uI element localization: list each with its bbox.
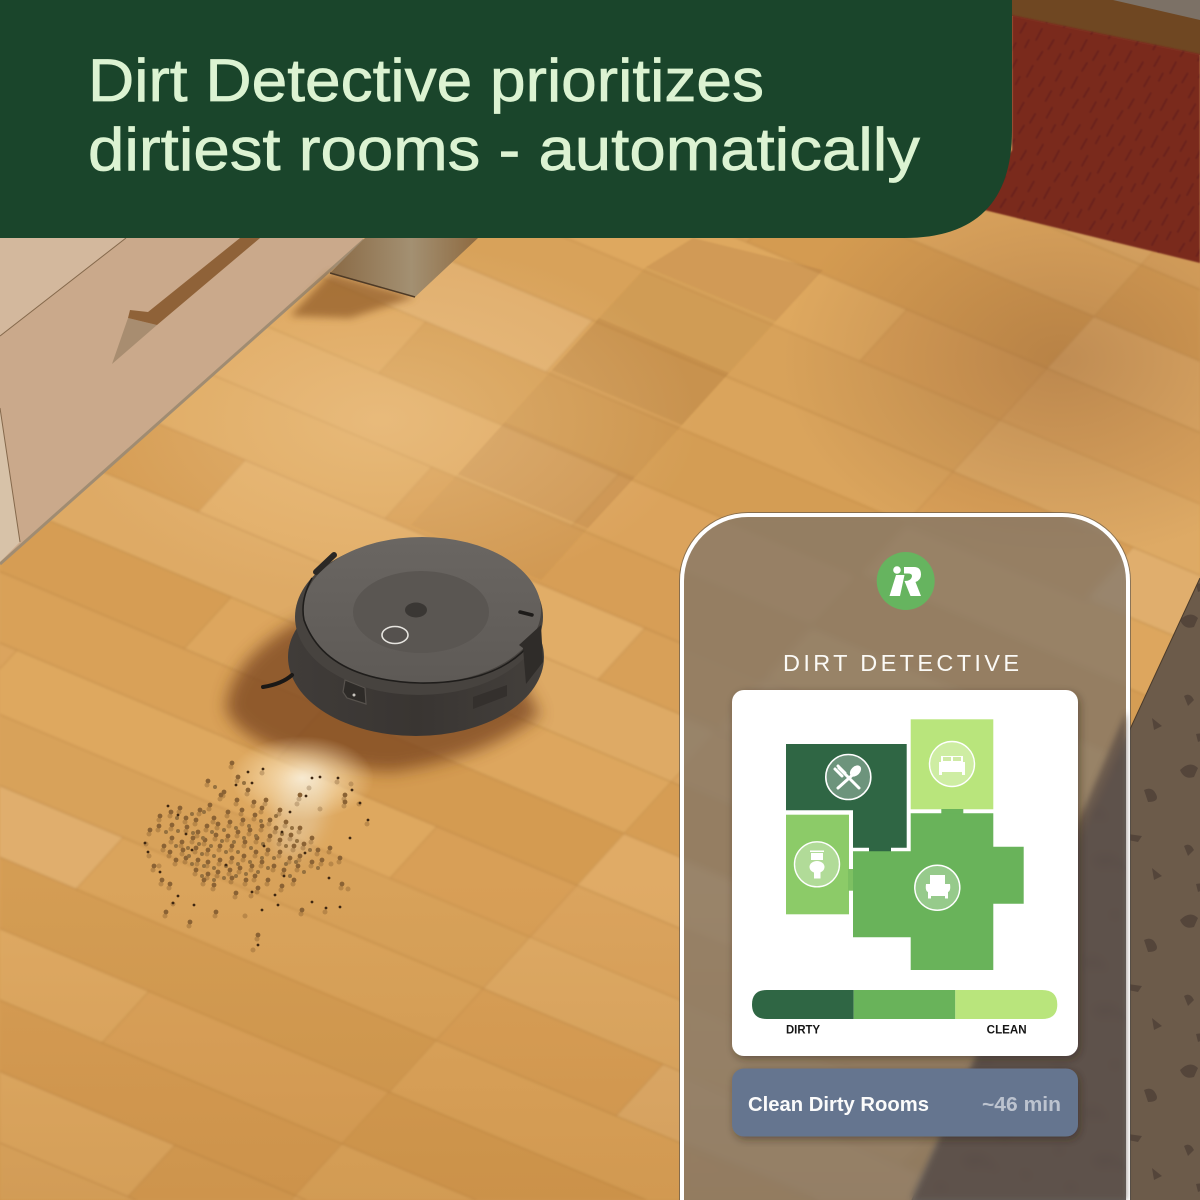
title: dirtiest rooms - automatically xyxy=(88,116,920,183)
legend label: dirty: DIRTY xyxy=(786,1024,820,1036)
robot lid xyxy=(303,537,541,683)
robot body xyxy=(288,578,544,736)
title: Dirt Detective prioritizes xyxy=(88,47,764,114)
speckled rug, bottom right xyxy=(912,578,1200,1200)
robot details xyxy=(316,555,334,572)
top right floor strip xyxy=(1012,0,1200,55)
kitchen cabinet xyxy=(0,238,364,564)
red rug xyxy=(972,15,1200,263)
robot inner disc xyxy=(353,571,489,653)
cabinet handle xyxy=(112,238,260,364)
darker plank stripe xyxy=(411,238,823,580)
robot rim xyxy=(295,539,543,695)
light spot on floor xyxy=(230,736,374,863)
panel: floor map card xyxy=(732,690,1078,1056)
rug tint seen through phone xyxy=(914,712,1126,1200)
robot shadow xyxy=(226,620,540,772)
appliance toe kick xyxy=(290,238,478,318)
button duration: ~46 min xyxy=(982,1093,1061,1116)
robot button ring xyxy=(382,626,408,644)
room: bedroom xyxy=(911,719,993,814)
floor map xyxy=(786,719,1024,970)
side brush xyxy=(263,675,292,687)
header banner xyxy=(0,0,1012,238)
room: living room xyxy=(853,813,1024,970)
robot vacuum xyxy=(263,537,544,736)
room: kitchen xyxy=(786,744,907,852)
dirt debris xyxy=(145,763,368,950)
legend bar xyxy=(752,990,1057,1019)
room: bathroom xyxy=(786,815,854,914)
phone frame with frosted glass xyxy=(680,513,1130,1200)
app logo xyxy=(877,552,935,610)
legend label: clean: CLEAN xyxy=(987,1024,1027,1036)
app heading: DIRT DETECTIVE xyxy=(783,650,1019,676)
title xyxy=(88,47,920,183)
robot logo dot xyxy=(405,602,427,618)
button label: Clean Dirty Rooms xyxy=(748,1093,929,1116)
robot front camera xyxy=(343,680,366,704)
robot vent xyxy=(473,685,507,709)
button: clean dirty rooms xyxy=(732,1068,1078,1136)
